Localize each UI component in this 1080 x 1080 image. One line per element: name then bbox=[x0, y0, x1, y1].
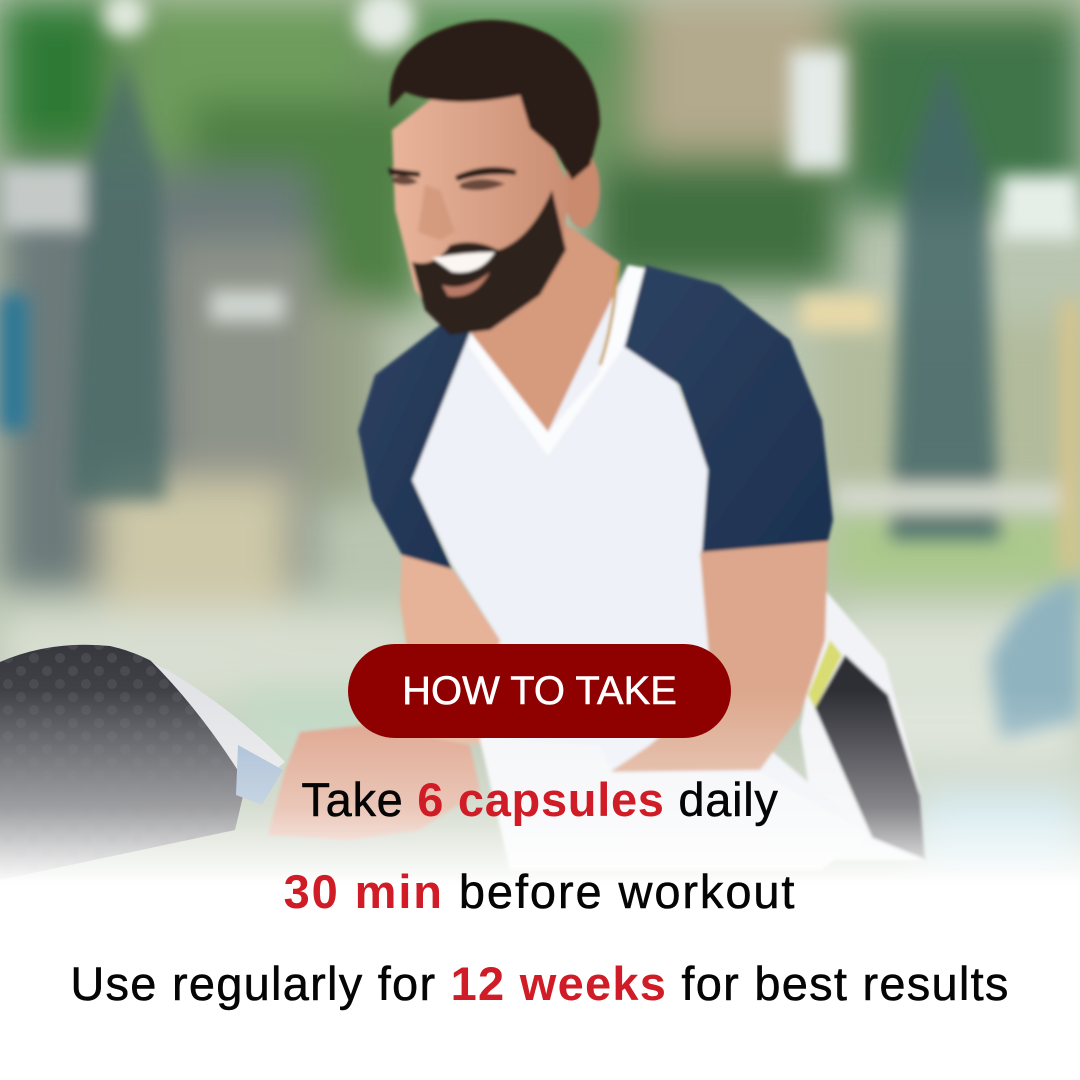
text: dosage: Take 6 capsules daily bbox=[301, 773, 779, 826]
far side shirt bbox=[800, 590, 925, 860]
shirt body bbox=[412, 265, 870, 870]
necklace bbox=[600, 265, 617, 365]
hand bbox=[268, 725, 480, 840]
man bbox=[268, 20, 925, 870]
text: duration: Use regularly for 12 weeks for best results bbox=[70, 957, 1010, 1010]
left arm bbox=[400, 555, 500, 745]
sleeve left bbox=[358, 325, 470, 569]
nose shade bbox=[418, 185, 455, 240]
ear bbox=[564, 152, 600, 228]
padel racket bbox=[0, 645, 285, 880]
eyes bbox=[388, 167, 516, 190]
right arm bbox=[610, 540, 828, 772]
smile bbox=[432, 252, 495, 273]
white fade at bottom bbox=[0, 690, 1080, 885]
wristband bbox=[480, 738, 870, 870]
badge: how to take: HOW TO TAKE bbox=[402, 669, 677, 713]
neck bbox=[440, 220, 620, 432]
face bbox=[392, 95, 570, 332]
beard bbox=[412, 190, 566, 335]
text: timing: 30 min before workout bbox=[284, 865, 796, 918]
collar bbox=[468, 265, 645, 456]
hair bbox=[390, 20, 600, 180]
badge: how to take bbox=[348, 644, 731, 738]
sleeve right bbox=[622, 265, 833, 552]
